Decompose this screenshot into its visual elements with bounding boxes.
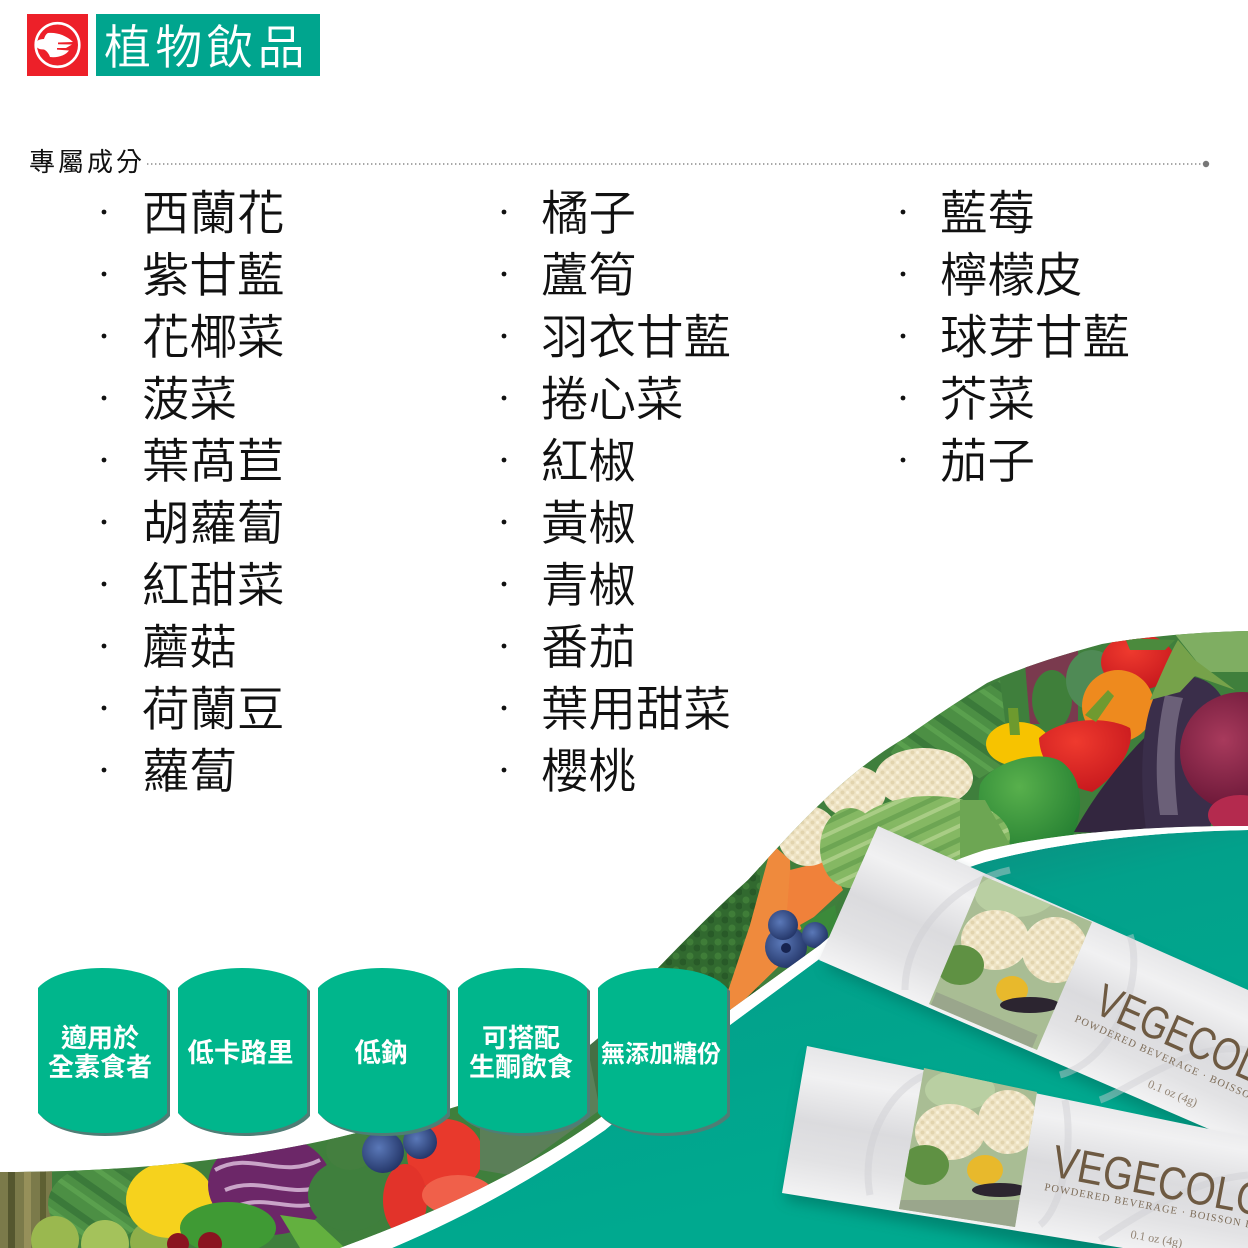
ingredient list: column 2: 紅椒: [541, 436, 636, 489]
vegetables: spinach: [308, 1133, 356, 1218]
badge: no added sugar: 無添加糖份: [601, 1040, 721, 1068]
vegetables: parsley: [180, 1202, 276, 1248]
ingredient list: column 1: 胡蘿蔔: [142, 498, 284, 551]
vegetables: yellow pepper: [986, 708, 1046, 764]
vegetables: cauliflower: [778, 748, 973, 866]
packet photo window: [929, 876, 1092, 1050]
vegetables: blueberries: [765, 910, 828, 968]
ingredient list: column 1: [102, 188, 284, 799]
badge: whole-food diets: 全素食者: [48, 1052, 152, 1082]
vegetables: leafy kale: [48, 1168, 138, 1240]
teal background: [392, 830, 1248, 1248]
ingredient list: column 2: 葉用甜菜: [541, 684, 731, 737]
vegetables: tomato and orange: [1082, 634, 1175, 742]
ingredient list: column 2: 捲心菜: [541, 374, 684, 427]
ingredient list: column 3: 球芽甘藍: [940, 312, 1130, 365]
ingredient list: column 3: [901, 188, 1130, 489]
packet swirl: [868, 1075, 1248, 1240]
logo: [27, 14, 88, 76]
badge: low calorie: [178, 968, 310, 1136]
vegetables: asparagus: [0, 1165, 52, 1248]
vegetables: eggplants: [1074, 676, 1228, 835]
ingredient list: column 2: 羽衣甘藍: [541, 312, 731, 365]
vegetables: red cabbage: [208, 1144, 327, 1235]
product packet: front: [782, 1046, 1248, 1248]
ingredient list: column 3: 藍莓: [940, 188, 1035, 241]
vegetables: blueberries lower: [362, 1125, 437, 1173]
badge: keto friendly: [458, 968, 590, 1136]
badge: keto friendly: 可搭配: [482, 1023, 560, 1053]
vegetables: pea pods: [280, 1215, 345, 1248]
ingredient list: column 2: 橘子: [541, 188, 636, 241]
ingredient list: column 1: 荷蘭豆: [142, 684, 284, 737]
ingredient list: column 2: 櫻桃: [541, 746, 636, 799]
product packet: back: [819, 826, 1248, 1156]
ingredient list: column 1: 葉萵苣: [142, 436, 284, 489]
badge: whole-food diets: [38, 968, 170, 1136]
ingredient list: column 1: 蘑菇: [142, 622, 237, 675]
badge: low sodium: 低鈉: [354, 1038, 408, 1068]
packet swirl: [905, 870, 1248, 1100]
ingredient list: column 2: 番茄: [541, 622, 636, 675]
section heading: [29, 147, 1209, 177]
vegetables: lemon: [126, 1162, 214, 1238]
vegetables: cabbage: [820, 796, 1030, 888]
packet body: [819, 826, 1248, 1146]
vegetables: red pepper: [1039, 690, 1131, 792]
ingredient list: column 3: 茄子: [940, 436, 1035, 489]
badge: whole-food diets: 適用於: [61, 1023, 139, 1053]
ingredient list: column 2: 黃椒: [541, 498, 636, 551]
badge: low calorie: 低卡路里: [188, 1038, 294, 1068]
ingredient list: column 2: 蘆筍: [541, 250, 636, 303]
vegetables: leafy greens behind: [891, 631, 1248, 778]
vegetables: green pepper: [978, 756, 1080, 845]
section heading: 專屬成分: [29, 147, 145, 177]
badge: no added sugar: [598, 968, 730, 1136]
vegetables: carrots: [725, 844, 843, 1012]
vegetable band: [0, 620, 1248, 1248]
ingredient list: column 2: [502, 188, 731, 799]
ingredient list: column 1: 蘿蔔: [142, 746, 237, 799]
ingredient list: column 3: 芥菜: [940, 374, 1035, 427]
vegetables: beet: [1180, 692, 1248, 835]
title banner: 植物飲品: [104, 21, 309, 74]
ingredient list: column 2: 青椒: [541, 560, 636, 613]
ingredient list: column 1: 紅甜菜: [142, 560, 284, 613]
ingredient list: column 1: 花椰菜: [142, 312, 284, 365]
vegetables: brussels sprouts: [31, 1216, 170, 1248]
vegetables: dark leaves: [480, 1060, 600, 1175]
packet weight: 0.1 oz (4g): [1146, 1077, 1200, 1109]
white swoosh stripe: [340, 826, 1248, 1248]
vegetables: kale and broccoli: [590, 867, 760, 1098]
packet photo window: [895, 1065, 1040, 1230]
ingredient list: column 1: 紫甘藍: [142, 250, 284, 303]
ingredient list: column 3: 檸檬皮: [940, 250, 1082, 303]
vegetables: cherries: [167, 1232, 222, 1248]
badge: low sodium: [318, 968, 450, 1136]
badge: keto friendly: 生酮飲食: [469, 1052, 573, 1082]
vegetables: eggplant stem leaf: [1150, 640, 1235, 700]
packet body: [782, 1046, 1248, 1248]
ingredient list: column 1: 西蘭花: [142, 188, 284, 241]
ingredient list: column 1: 菠菜: [142, 374, 237, 427]
vegetables: tomatoes: [383, 1119, 488, 1228]
